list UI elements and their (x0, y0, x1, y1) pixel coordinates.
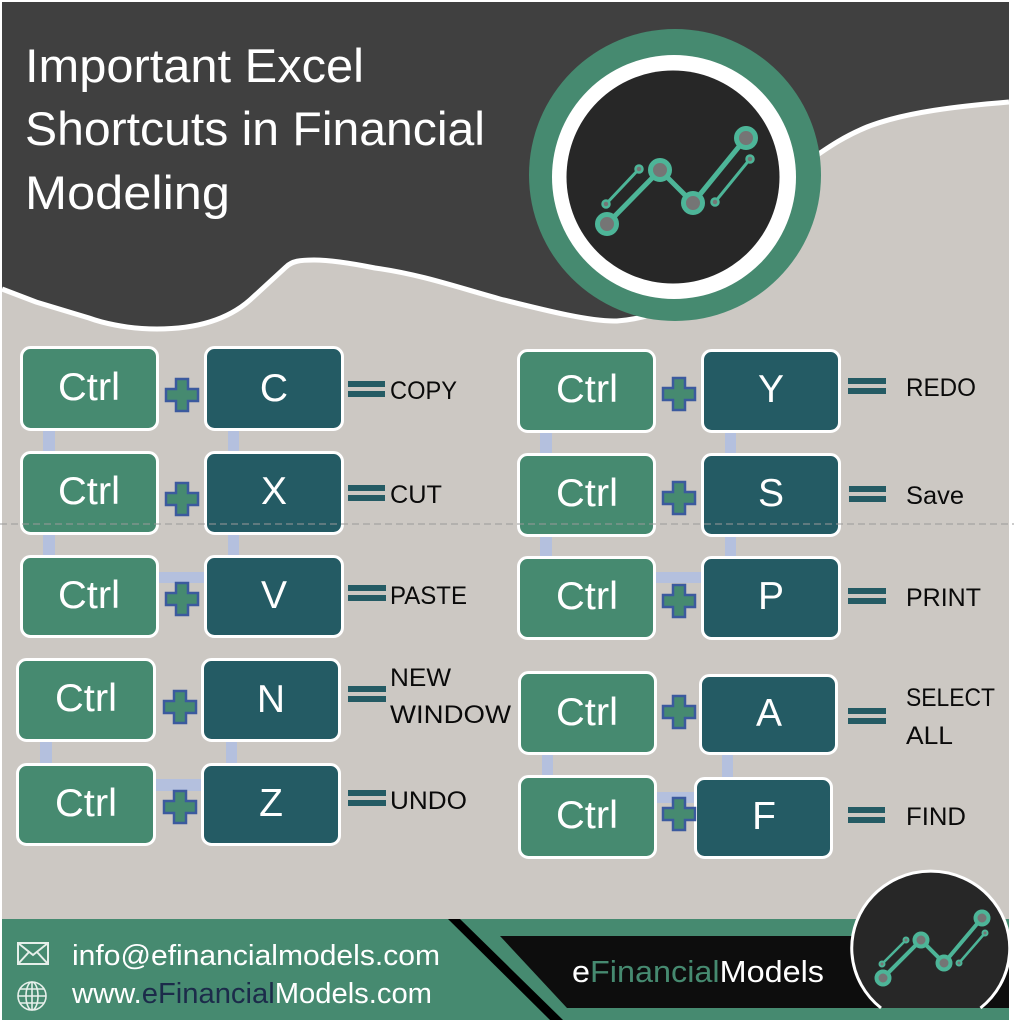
shortcut: Ctrl+Y redo (518, 350, 976, 432)
logo badge (529, 29, 821, 321)
shortcut: Ctrl+A select all: Ctrl (556, 691, 618, 734)
shortcut: Ctrl+C copy: Ctrl (58, 366, 120, 409)
shortcut: Ctrl+F find: Ctrl (556, 794, 618, 837)
shortcut: Ctrl+X cut: CUT (390, 481, 442, 509)
shortcut: Ctrl+Y redo: Y (758, 368, 784, 411)
shortcut: Ctrl+P print (518, 558, 981, 638)
shortcut: Ctrl+C copy: C (260, 367, 288, 410)
shortcut: Ctrl+X cut: Ctrl (58, 470, 120, 513)
contact website: www.eFinancialModels.com (71, 978, 432, 1010)
shortcut: Ctrl+V paste: V (261, 574, 287, 617)
shortcut: Ctrl+Z undo: Ctrl (55, 782, 117, 825)
shortcut: Ctrl+V paste: PASTE (390, 582, 467, 610)
shortcut: Ctrl+S save (518, 454, 964, 536)
shortcut: Ctrl+P print: Ctrl (556, 575, 618, 618)
shortcut: Ctrl+F find (520, 776, 966, 858)
contact email: info@efinancialmodels.com (72, 940, 440, 972)
footer band (2, 919, 1009, 1020)
brand name: eFinancialModels (572, 954, 824, 989)
icon: line chart small (876, 912, 988, 984)
shortcut: Ctrl+A select all: ALL (906, 722, 953, 750)
shortcut: Ctrl+S save: S (758, 472, 784, 515)
shortcut: Ctrl+X cut (22, 452, 442, 534)
shortcut: Ctrl+X cut: X (261, 470, 287, 513)
shortcut: Ctrl+N new window: Ctrl (55, 677, 117, 720)
shortcut: Ctrl+N new window (18, 660, 511, 740)
shortcut: Ctrl+Y redo: REDO (906, 374, 976, 402)
shortcut: Ctrl+F find: FIND (906, 803, 966, 831)
shortcut: Ctrl+V paste (22, 556, 467, 636)
diagonal stripe (448, 919, 563, 1020)
shortcut: Ctrl+N new window: N (257, 678, 285, 721)
footer logo badge (852, 871, 1010, 1008)
shortcut: Ctrl+P print: PRINT (906, 584, 981, 612)
shortcut: Ctrl+Z undo: UNDO (390, 787, 467, 815)
shortcut: Ctrl+S save: Ctrl (556, 472, 618, 515)
shortcut: Ctrl+N new window: NEW (390, 664, 451, 692)
shortcut: Ctrl+V paste: Ctrl (58, 574, 120, 617)
icon: globe (18, 982, 46, 1010)
title: Modeling (25, 166, 230, 219)
shortcut: Ctrl+C copy: COPY (390, 377, 457, 405)
shortcut: Ctrl+Z undo (18, 764, 467, 844)
shortcut: Ctrl+S save: Save (906, 482, 964, 510)
title: Important Excel (25, 39, 364, 92)
connector bars (40, 429, 736, 803)
shortcut: Ctrl+C copy (22, 348, 457, 430)
shortcut: Ctrl+A select all: SELECT (906, 684, 995, 712)
shortcut: Ctrl+N new window: WINDOW (390, 701, 511, 729)
shortcut: Ctrl+Z undo: Z (259, 782, 283, 825)
header dark wave (2, 2, 1009, 329)
shortcut: Ctrl+Y redo: Ctrl (556, 368, 618, 411)
title (25, 39, 485, 219)
shortcut: Ctrl+A select all: A (756, 692, 782, 735)
header wave white edge (2, 102, 1009, 329)
brand banner (500, 936, 1009, 1008)
icon: envelope (18, 943, 48, 964)
shortcut: Ctrl+A select all (520, 672, 995, 754)
icon: line chart (598, 128, 756, 234)
title: Shortcuts in Financial (25, 102, 485, 155)
shortcut: Ctrl+P print: P (758, 575, 784, 618)
shortcut: Ctrl+F find: F (752, 795, 776, 838)
